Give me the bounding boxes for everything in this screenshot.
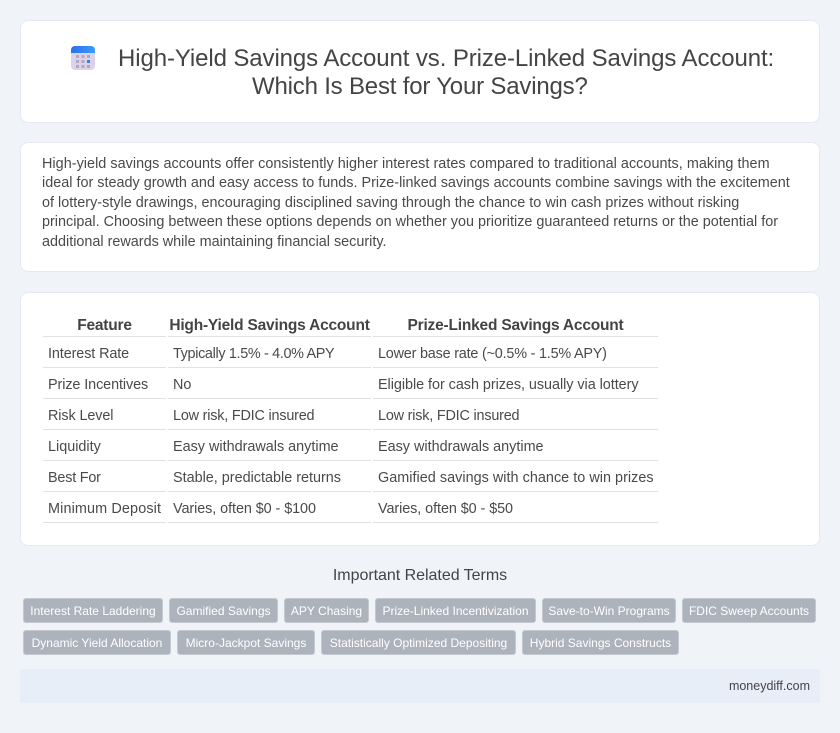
comparison table: Best For xyxy=(48,470,101,486)
related term tags: Dynamic Yield Allocation xyxy=(32,636,162,650)
text block: introduction: High-yield savings accounts offer consistently higher interest rates compared to traditional accounts, making them xyxy=(42,156,770,172)
icon: calendar xyxy=(71,46,95,70)
text block: introduction: of lottery-style drawings, encouraging disciplined saving through the chance to win cash prizes without risking xyxy=(42,195,739,211)
comparison table: Varies, often $0 - $100 xyxy=(173,501,316,517)
comparison table: Gamified savings with chance to win prizes xyxy=(378,470,654,486)
comparison table: Risk Level xyxy=(48,408,113,424)
related term tags: Prize-Linked Incentivization xyxy=(382,604,529,618)
related term tags: Hybrid Savings Constructs xyxy=(530,636,671,650)
related term tags: Interest Rate Laddering xyxy=(30,604,156,618)
comparison table: Interest Rate xyxy=(48,346,129,362)
panel: comparison table xyxy=(20,292,820,546)
comparison table: Lower base rate (~0.5% - 1.5% APY) xyxy=(378,346,607,362)
comparison table xyxy=(43,317,658,523)
text block: introduction: ideal for steady growth and easy access to funds. Prize-linked savings accounts combine savings with the excitement xyxy=(42,175,790,191)
comparison table: Easy withdrawals anytime xyxy=(378,439,544,455)
comparison table: Prize Incentives xyxy=(48,377,148,393)
footer: site name: moneydiff.com xyxy=(729,679,810,693)
comparison table: Typically 1.5% - 4.0% APY xyxy=(173,346,334,362)
comparison table: Minimum Deposit xyxy=(48,501,161,517)
text block: introduction: additional rewards while maintaining financial security. xyxy=(42,234,386,250)
panel: title header: High-Yield Savings Account vs. Prize-Linked Savings Account: xyxy=(118,45,774,72)
related term tags: FDIC Sweep Accounts xyxy=(689,604,809,618)
comparison table: Eligible for cash prizes, usually via lottery xyxy=(378,377,639,393)
panel: title header xyxy=(20,20,820,123)
comparison table: Varies, often $0 - $50 xyxy=(378,501,513,517)
text block: introduction: principal. Choosing between these options depends on whether you prioritize guaranteed returns or the potential for xyxy=(42,214,778,230)
related term tags: Save-to-Win Programs xyxy=(548,604,670,618)
title xyxy=(118,45,774,100)
related term tags: APY Chasing xyxy=(291,604,362,618)
related term tags: Statistically Optimized Depositing xyxy=(330,636,507,650)
comparison table: Low risk, FDIC insured xyxy=(378,408,519,424)
comparison table: Stable, predictable returns xyxy=(173,470,341,486)
comparison table: Easy withdrawals anytime xyxy=(173,439,339,455)
heading: important related terms: Important Related Terms xyxy=(333,567,507,584)
panel: title header: Which Is Best for Your Savings? xyxy=(252,73,588,100)
related term tags xyxy=(23,598,816,655)
comparison table: High-Yield Savings Account xyxy=(169,317,370,334)
related term tags: Micro-Jackpot Savings xyxy=(186,636,306,650)
panel: introduction text xyxy=(20,142,820,272)
comparison table: Prize-Linked Savings Account xyxy=(407,317,624,334)
footer xyxy=(20,669,820,703)
comparison table: Liquidity xyxy=(48,439,101,455)
comparison table: Low risk, FDIC insured xyxy=(173,408,314,424)
text block: introduction xyxy=(42,156,790,250)
comparison table: No xyxy=(173,377,191,393)
related term tags: Gamified Savings xyxy=(176,604,271,618)
comparison table: Feature xyxy=(77,317,132,334)
